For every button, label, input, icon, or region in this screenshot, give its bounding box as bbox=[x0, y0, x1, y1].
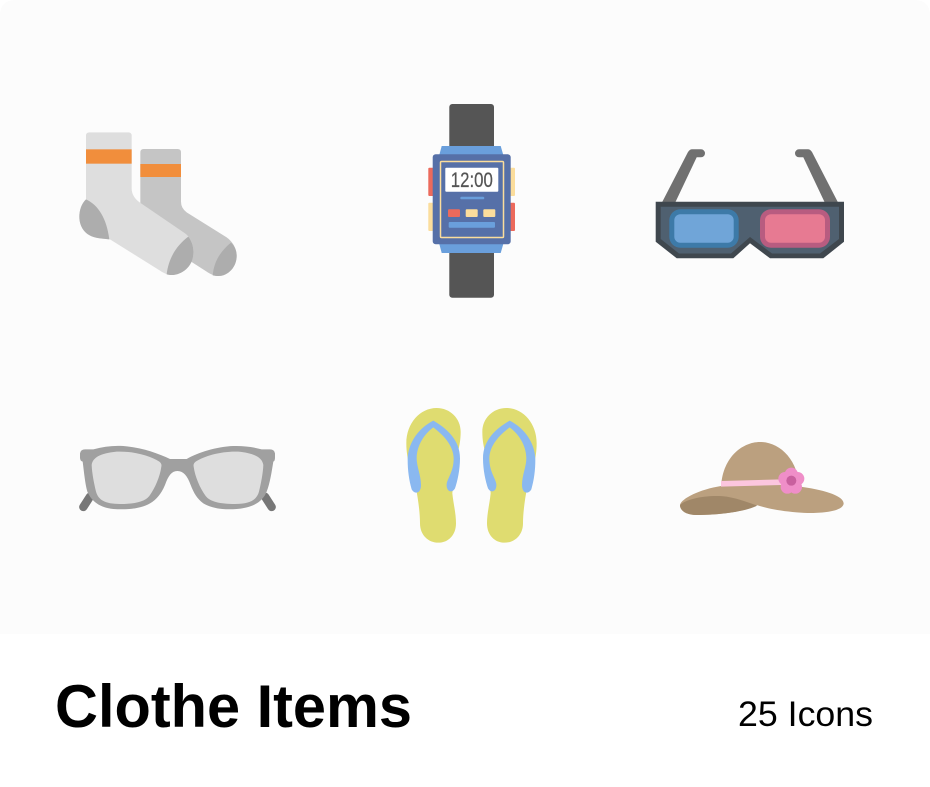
crown bbox=[721, 442, 799, 488]
icon: flip flops bbox=[406, 408, 537, 543]
watch case bbox=[433, 154, 511, 244]
left flip flop bbox=[406, 408, 461, 543]
title: Clothe Items bbox=[55, 673, 412, 740]
back sock bbox=[140, 149, 237, 276]
blue bar bbox=[449, 222, 495, 228]
icon: sun hat bbox=[680, 442, 844, 515]
blue lens bbox=[669, 209, 739, 248]
screen bbox=[445, 168, 498, 192]
ribbon bbox=[721, 479, 782, 487]
icon count: 25 Icons bbox=[738, 695, 873, 734]
temples bbox=[662, 149, 838, 203]
time readout: 12:00 bbox=[451, 169, 493, 192]
icon: digital wrist watch bbox=[428, 104, 515, 298]
red lens bbox=[760, 209, 830, 248]
right flip flop bbox=[482, 408, 537, 543]
watch strap bbox=[449, 104, 494, 298]
icon: socks bbox=[79, 132, 237, 276]
brim bbox=[680, 484, 844, 515]
frame bbox=[80, 446, 275, 509]
blue indicator line bbox=[460, 197, 484, 199]
icon: eyeglasses bbox=[80, 446, 275, 509]
icon: 3D glasses bbox=[656, 149, 844, 258]
flower bbox=[778, 468, 804, 494]
temple tips bbox=[83, 497, 272, 507]
side buttons bbox=[428, 168, 515, 231]
right lens bbox=[194, 452, 263, 504]
outer frame bbox=[656, 202, 844, 258]
brim underside bbox=[680, 496, 757, 515]
control buttons bbox=[448, 209, 495, 217]
front sock bbox=[79, 132, 193, 275]
left lens bbox=[92, 452, 161, 504]
inner border bbox=[440, 162, 504, 238]
watch lugs bbox=[439, 146, 503, 253]
inner frame bbox=[661, 207, 839, 254]
